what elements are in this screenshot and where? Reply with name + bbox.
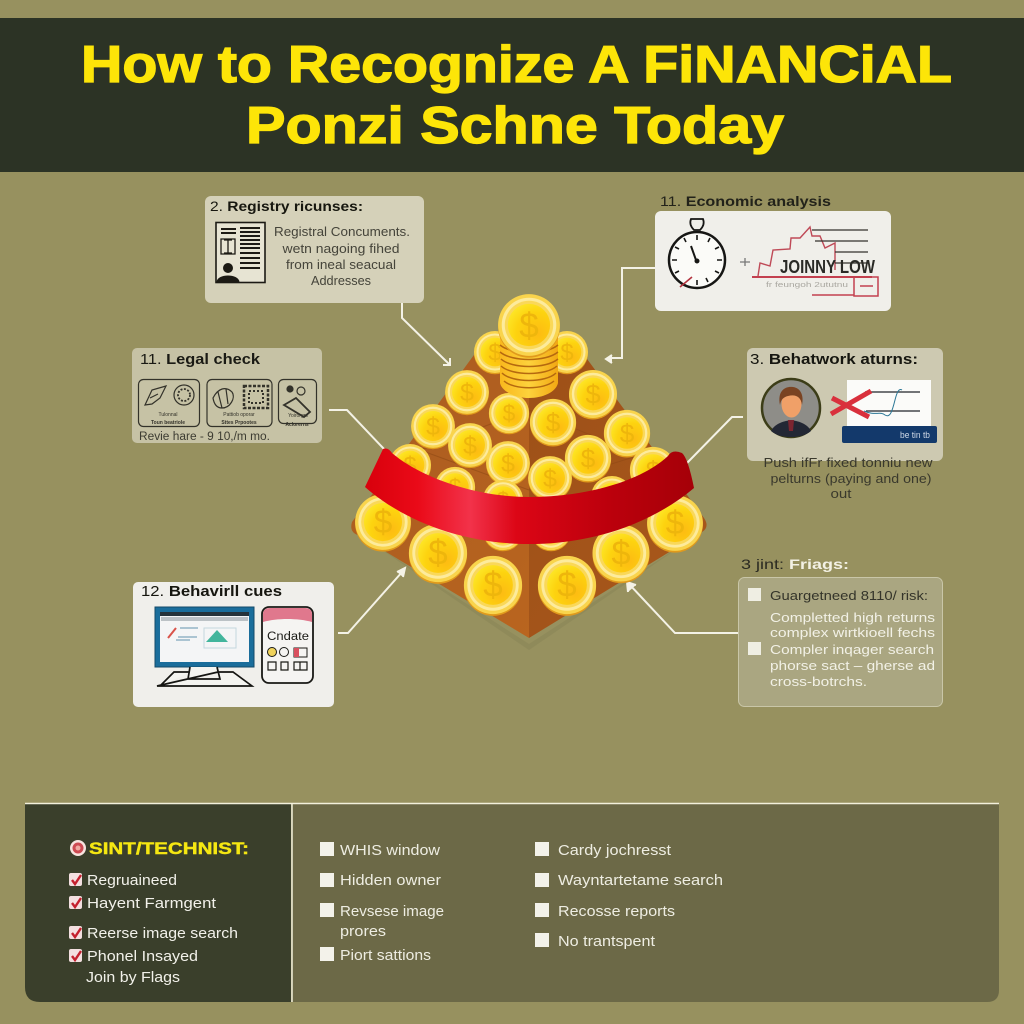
heading: behavioral cues: 12. Behavirll cues	[141, 584, 282, 600]
flag checkboxes	[748, 588, 761, 655]
flag text: Completted high returns	[770, 610, 936, 625]
coins: back rows: $	[543, 466, 557, 493]
coins: front row	[355, 494, 703, 616]
coins: back rows: $	[463, 433, 477, 460]
column: checks two: Recosse reports	[558, 904, 675, 920]
panel: economic analysis	[655, 193, 891, 311]
column: checks two: Cardy jochresst	[558, 843, 671, 859]
icon row: legal: Aclorerns	[285, 422, 309, 428]
flag text: Guargetneed 8110/ risk:	[770, 588, 928, 603]
title	[81, 36, 952, 155]
flag text: phorse sact – gherse ad	[770, 658, 935, 673]
heading: economic analysis: 11. Economic analysis	[660, 193, 831, 209]
coins: front row: $	[557, 566, 577, 605]
icon: avatar	[762, 379, 820, 437]
connector arrows	[329, 268, 743, 633]
behatwork caption: out	[830, 486, 852, 501]
coins: back rows: $	[403, 452, 417, 479]
osint list: Phonel Insayed	[87, 949, 198, 965]
osint list: Hayent Farmgent	[87, 896, 216, 912]
osint list	[86, 873, 238, 986]
panel: joint flags	[738, 556, 942, 706]
flag text: complex wirtkioell fechs	[770, 625, 936, 640]
flag text	[770, 588, 936, 689]
plus sign	[740, 258, 750, 266]
column: checks two: No trantspent	[558, 934, 655, 950]
registry text: from ineal seacual	[286, 258, 396, 272]
chart: joinny low	[752, 227, 878, 296]
icon row: legal: Toun beatriole	[151, 420, 185, 426]
flag text: Compler inqager search	[770, 642, 934, 657]
blue action bar	[842, 426, 937, 443]
icon row: legal: Sttes Prpootes	[221, 420, 257, 426]
panel: behavioral cues	[133, 582, 334, 707]
osint list: Join by Flags	[86, 970, 180, 986]
icon: calendar note	[262, 607, 313, 683]
heading: behatwork: 3. Behatwork aturns:	[750, 352, 918, 368]
top and divider rules	[25, 804, 999, 1002]
coins: front row: $	[428, 534, 448, 573]
registry text	[274, 225, 410, 288]
registry text: Addresses	[311, 274, 371, 288]
title: How to Recognize A FiNANCiAL	[81, 36, 952, 94]
column: checks one: Revsese image	[340, 904, 444, 920]
coins: front row: $	[483, 566, 503, 605]
coins: back rows: $	[497, 517, 510, 543]
red ribbon	[365, 448, 694, 544]
coins: back rows: $	[426, 414, 440, 441]
heading: registry: 2. Registry ricunses:	[210, 199, 363, 214]
heading: flags: 3 jint: Friags:	[741, 556, 849, 572]
coins: back rows: $	[546, 407, 561, 437]
coins: back rows: $	[449, 474, 462, 500]
icon: target	[70, 840, 86, 856]
coin stack: $	[519, 306, 539, 345]
chart: rising line	[831, 380, 931, 426]
coins: back rows	[389, 331, 676, 551]
heading: legal check: 11. Legal check	[140, 351, 261, 368]
icon row: legal: Pattiob oporar	[223, 412, 255, 418]
panel: registry	[205, 196, 424, 303]
registry text: wetn nagoing fihed	[281, 242, 400, 256]
icon row: legal: Tulonnal	[158, 412, 178, 418]
chart sublabel: fr feungoh 2ututnu	[766, 282, 848, 289]
icon: stopwatch	[669, 219, 725, 288]
coins: back rows: $	[581, 443, 596, 473]
right section background	[292, 804, 999, 1002]
check marks	[72, 875, 81, 960]
coins: back rows: $	[497, 487, 510, 513]
column: checks one: prores	[340, 924, 386, 940]
column: checks two: Wayntartetame search	[558, 873, 723, 889]
icon: document	[216, 222, 265, 282]
coins: back rows: $	[646, 455, 661, 485]
flag text: cross-botrchs.	[770, 674, 867, 689]
column: checks one: WHIS window	[340, 843, 441, 859]
coin stack	[498, 294, 560, 398]
coins: front row: $	[374, 504, 393, 541]
pyramid faces	[351, 348, 529, 638]
coins: back rows: $	[545, 517, 558, 543]
coins: back rows: $	[488, 339, 502, 366]
coins: back rows: $	[460, 380, 474, 407]
coins: back rows: $	[501, 451, 515, 478]
osint list: Reerse image search	[87, 926, 238, 942]
title band	[0, 18, 1024, 172]
coins: back rows: $	[620, 418, 635, 448]
coins: front row: $	[666, 505, 685, 542]
panel: bottom checklist	[25, 804, 999, 1002]
pyramid of coins	[351, 294, 707, 650]
icon: monitor	[155, 607, 254, 686]
pyramid shadow	[360, 533, 700, 650]
coins: front row: $	[611, 534, 631, 572]
chart label: JOINNY LOW	[780, 257, 875, 277]
icon row: legal	[138, 380, 316, 428]
panel: legal check	[132, 348, 322, 443]
registry text: Registral Concuments.	[274, 225, 410, 239]
column: checks one	[320, 842, 444, 964]
panel: behatwork returns	[747, 348, 943, 501]
column: checks one: Piort sattions	[340, 948, 431, 964]
icon: calendar note: Cndate	[267, 631, 309, 643]
coins: back rows: $	[503, 400, 516, 426]
coins: back rows: $	[605, 484, 619, 511]
icon row: legal: Yoirorgrs	[288, 413, 308, 419]
title: Ponzi Schne Today	[246, 97, 784, 155]
left section: osint	[25, 804, 291, 1002]
checked boxes	[69, 873, 82, 962]
icon: red cross	[831, 391, 871, 417]
osint list: Regruaineed	[87, 873, 177, 889]
column: checks one: Hidden owner	[340, 873, 441, 889]
heading: osint: SINT/TECHNIST:	[89, 840, 249, 858]
coins: back rows: $	[560, 339, 574, 366]
behatwork caption	[764, 455, 933, 501]
column: checks two	[535, 842, 723, 950]
legal footer text: Revie hare - 9 10,/m mo.	[139, 431, 270, 443]
coins: back rows: $	[585, 379, 601, 410]
behatwork caption: pelturns (paying and one)	[770, 471, 932, 486]
behatwork caption: Push ifFr fixed tonniu new	[764, 455, 933, 470]
blue action bar: be tin tb	[900, 430, 930, 440]
